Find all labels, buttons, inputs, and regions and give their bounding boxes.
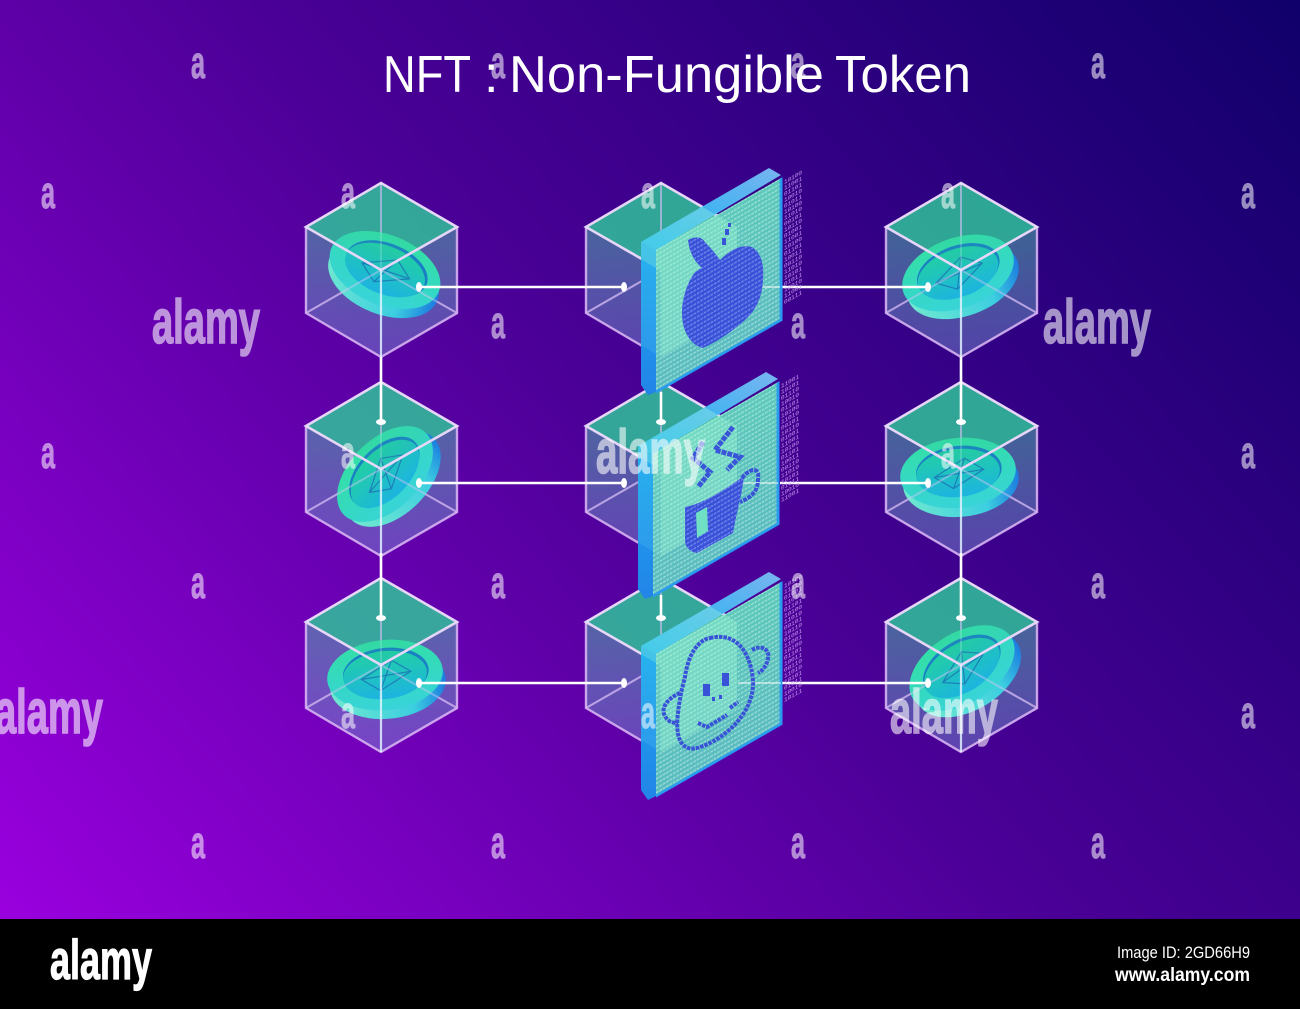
NFT panel: apple: 11001 xyxy=(784,283,802,300)
NFT panel: monkey: 11001 xyxy=(784,633,802,650)
NFT panel: apple: 01011 xyxy=(784,271,802,288)
NFT panel: coffee cup: 01110 xyxy=(781,385,799,402)
NFT panel: coffee cup: 00101 xyxy=(781,415,799,432)
NFT panel: apple: 00110 xyxy=(784,253,802,270)
watermark letters: a xyxy=(191,817,206,868)
NFT panel: apple: 10100 xyxy=(784,169,802,186)
NFT panel: coffee cup: 10100 xyxy=(781,403,799,420)
block: right column, row 2 xyxy=(886,382,1037,556)
NFT panel: coffee cup: 11001 xyxy=(781,433,799,450)
NFT panel: monkey: 01101 xyxy=(784,597,802,614)
watermark: alamy centre: alamy xyxy=(596,418,705,487)
site url: www.alamy.com xyxy=(1114,965,1250,986)
NFT panel: coffee cup: 11010 xyxy=(781,463,799,480)
watermark letters: a xyxy=(1241,687,1256,738)
watermark letters: a xyxy=(491,817,506,868)
NFT panel: coffee cup: 10100 xyxy=(781,439,799,456)
watermark letters: a xyxy=(491,557,506,608)
watermark letters: a xyxy=(41,427,56,478)
NFT panel: apple xyxy=(641,168,802,395)
watermark letters: a xyxy=(941,167,956,218)
NFT panel: monkey: 10100 xyxy=(784,639,802,656)
NFT panel: coffee cup: 00110 xyxy=(781,457,799,474)
block: centre column, row 2 xyxy=(586,382,737,556)
block: centre column, row 1 xyxy=(586,183,737,357)
NFT panel: apple: 10010 xyxy=(784,277,802,294)
NFT panel: apple: 10100 xyxy=(784,199,802,216)
NFT panel: apple: 11010 xyxy=(784,259,802,276)
footer bar xyxy=(0,919,1300,1009)
watermark letters: a xyxy=(341,167,356,218)
title: Token xyxy=(835,46,971,104)
watermark letters: a xyxy=(941,427,956,478)
NFT panel: apple: 11001 xyxy=(784,175,802,192)
watermark: alamy lower left: alamy xyxy=(0,678,103,747)
NFT panel: monkey: 10100 xyxy=(784,573,802,590)
NFT panel: monkey: 11010 xyxy=(784,609,802,626)
title: : xyxy=(484,46,498,104)
NFT panel: monkey: 11010 xyxy=(784,591,802,608)
watermark letters: a xyxy=(191,37,206,88)
NFT panel: monkey: 00101 xyxy=(784,615,802,632)
NFT panel: coffee cup: 01011 xyxy=(781,475,799,492)
watermark letters: a xyxy=(491,297,506,348)
NFT panel: apple: 01101 xyxy=(784,181,802,198)
watermark letters: a xyxy=(341,687,356,738)
watermark letters: a xyxy=(641,167,656,218)
watermark letters: a xyxy=(791,817,806,868)
watermark: alamy right: alamy xyxy=(1043,288,1151,357)
watermark letters: a xyxy=(1241,167,1256,218)
block: left column, row 2 xyxy=(306,382,459,556)
NFT panel: monkey: 01001 xyxy=(784,627,802,644)
NFT panel: monkey: 10101 xyxy=(784,669,802,686)
block: right column, row 3 xyxy=(886,578,1037,752)
title xyxy=(383,46,971,104)
image id: Image ID: 2GD66H9 xyxy=(1117,944,1250,962)
NFT panel: apple: 11010 xyxy=(784,205,802,222)
NFT panel: coffee cup: 01101 xyxy=(781,445,799,462)
NFT panel: apple: 10100 xyxy=(784,235,802,252)
NFT panel: coffee cup: 10010 xyxy=(781,391,799,408)
watermark: alamy left: alamy xyxy=(152,288,260,357)
NFT panel: apple: 00111 xyxy=(784,289,802,306)
NFT panel: apple: 01001 xyxy=(784,223,802,240)
NFT panel: monkey: 01001 xyxy=(784,585,802,602)
NFT panel: coffee cup: 10011 xyxy=(781,451,799,468)
NFT panel: apple: 01101 xyxy=(784,241,802,258)
NFT panel: coffee cup: 11001 xyxy=(781,373,799,390)
watermark letters: a xyxy=(791,37,806,88)
NFT panel: monkey: 10111 xyxy=(784,687,802,704)
watermark letters xyxy=(41,37,1256,868)
watermark letters: a xyxy=(191,557,206,608)
watermark letters: a xyxy=(341,427,356,478)
block: left column, row 3 xyxy=(306,578,457,752)
NFT panel: coffee cup: 10110 xyxy=(781,421,799,438)
NFT panel: coffee cup: 11010 xyxy=(781,409,799,426)
watermark letters: a xyxy=(41,167,56,218)
NFT panel: coffee cup: 10010 xyxy=(781,481,799,498)
NFT panel: monkey: 01011 xyxy=(784,675,802,692)
watermark letters: a xyxy=(491,37,506,88)
NFT panel: monkey: 11110 xyxy=(784,579,802,596)
watermark letters: a xyxy=(791,297,806,348)
NFT panel: apple: 10011 xyxy=(784,247,802,264)
NFT panel: monkey: 01101 xyxy=(784,645,802,662)
NFT panel: coffee cup: 10101 xyxy=(781,379,799,396)
NFT panel: coffee cup: 01101 xyxy=(781,397,799,414)
NFT panel: monkey xyxy=(641,572,802,800)
NFT panel: coffee cup: 10101 xyxy=(781,469,799,486)
watermark letters: a xyxy=(1091,557,1106,608)
NFT panel: monkey: 00110 xyxy=(784,657,802,674)
block: left column, row 1 xyxy=(306,183,457,357)
NFT panel: monkey: 10010 xyxy=(784,681,802,698)
watermark: alamy lower right: alamy xyxy=(890,678,998,747)
NFT panel: apple: 10110 xyxy=(784,217,802,234)
watermark letters: a xyxy=(1091,817,1106,868)
NFT panel: apple: 10101 xyxy=(784,265,802,282)
NFT panel: apple: 00101 xyxy=(784,211,802,228)
NFT panel: monkey: 10110 xyxy=(784,621,802,638)
NFT panel: apple: 10010 xyxy=(784,187,802,204)
watermark letters: a xyxy=(1091,37,1106,88)
NFT panel: coffee cup: 01001 xyxy=(781,427,799,444)
block: right column, row 1 xyxy=(886,183,1037,357)
title: Non-Fungible xyxy=(509,46,824,104)
watermark letters: a xyxy=(641,687,656,738)
NFT panel: apple: 11001 xyxy=(784,229,802,246)
NFT panel: coffee cup xyxy=(638,372,799,599)
watermark letters: a xyxy=(791,557,806,608)
watermark letters: a xyxy=(1241,427,1256,478)
NFT panel: monkey: 10011 xyxy=(784,651,802,668)
NFT panel: monkey: 11010 xyxy=(784,663,802,680)
footer logo: alamy xyxy=(50,928,152,991)
NFT panel: coffee cup: 11001 xyxy=(781,487,799,504)
block: centre column, row 3 xyxy=(586,578,737,752)
connector lines xyxy=(376,282,966,688)
NFT panel: monkey: 10100 xyxy=(784,603,802,620)
title: NFT xyxy=(383,46,471,104)
NFT panel: apple: 01011 xyxy=(784,193,802,210)
